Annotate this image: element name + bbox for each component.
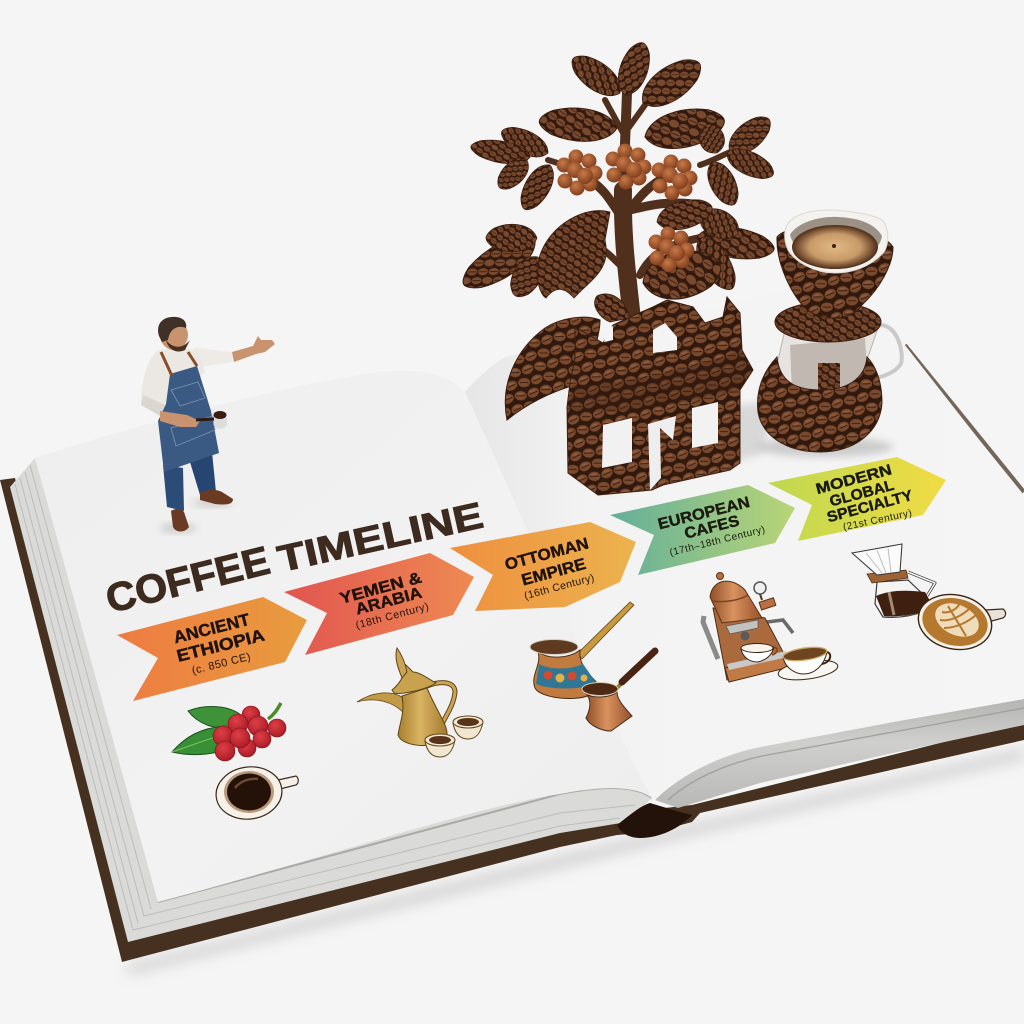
paper filter — [785, 210, 888, 273]
timeline arrow: Yemen and Arabia: (18th Century) — [354, 601, 430, 632]
shoes — [171, 509, 189, 532]
timeline arrow: Ancient Ethiopia: ANCIENT — [172, 610, 252, 647]
right page — [465, 275, 1024, 800]
coffee bean tree — [455, 38, 778, 322]
house body — [567, 297, 753, 495]
icon: cup and saucer — [777, 645, 839, 683]
title: COFFEE — [102, 539, 274, 622]
icon: Ottoman cezve pots — [530, 602, 655, 731]
legs — [163, 465, 184, 511]
shirt torso — [141, 348, 205, 417]
glass carafe — [760, 322, 880, 400]
left page stack — [10, 458, 652, 942]
cup — [214, 413, 227, 429]
left page — [35, 371, 652, 902]
coffee bed — [792, 225, 878, 269]
house windows — [602, 418, 632, 468]
timeline arrow: Ottoman Empire — [450, 522, 636, 611]
timeline arrow: Modern Global Specialty: (21st Century) — [842, 508, 913, 533]
book — [0, 275, 1024, 975]
timeline arrow: European Cafes: CAFES — [683, 513, 741, 543]
timeline arrow: European Cafes: EUROPEAN — [656, 494, 752, 533]
timeline arrow: European Cafes: (17th–18th Century) — [669, 524, 766, 559]
icon: coffee cherries with leaves — [172, 703, 286, 761]
timeline arrow: Ancient Ethiopia: ETHIOPIA — [175, 626, 267, 666]
timeline arrow: Modern Global Specialty — [768, 457, 946, 541]
timeline arrow: Modern Global Specialty: MODERN — [814, 461, 894, 498]
icon: copper espresso machine — [703, 572, 793, 682]
doorway — [648, 416, 676, 490]
timeline arrow: European Cafes — [610, 485, 795, 575]
timeline arrow: Yemen and Arabia: YEMEN & — [338, 569, 424, 608]
barista figure — [141, 317, 275, 532]
timeline arrow: Ottoman Empire: OTTOMAN — [503, 535, 591, 574]
apron — [158, 366, 219, 472]
carafe handle — [876, 325, 902, 378]
head — [160, 320, 188, 350]
timeline arrow: Ancient Ethiopia — [117, 597, 307, 701]
timeline arrow: Yemen and Arabia — [284, 553, 474, 655]
side leaf mass — [505, 317, 600, 420]
timeline arrow: Modern Global Specialty: SPECIALTY — [825, 487, 915, 526]
saucer — [775, 302, 881, 342]
coffee bean pour-over — [758, 210, 902, 452]
carafe base — [758, 357, 882, 452]
grounds inside — [818, 363, 840, 393]
timeline arrow: Ottoman Empire: (16th Century) — [523, 572, 596, 602]
trunk and branches — [548, 93, 735, 320]
apron straps — [161, 352, 197, 376]
icon: pour-over carafe — [852, 544, 935, 617]
right page stack — [655, 699, 1024, 808]
coffee bean house — [505, 297, 753, 495]
icon: espresso cup — [213, 763, 298, 823]
icon: Arabic dallah pot with cups — [357, 648, 483, 757]
title: TIMELINE — [274, 495, 487, 580]
timeline arrow: Modern Global Specialty: GLOBAL — [828, 477, 896, 510]
timeline arrow: Yemen and Arabia: ARABIA — [354, 585, 424, 619]
dripper cone — [777, 227, 893, 318]
object shadows — [160, 400, 893, 533]
book cover — [0, 478, 1024, 962]
bean leaves — [455, 38, 778, 322]
title — [102, 495, 487, 622]
book shadow — [125, 748, 1024, 975]
timeline arrow: Ancient Ethiopia: (c. 850 CE) — [191, 651, 252, 677]
forearm and hand — [160, 411, 200, 427]
extended arm — [232, 336, 275, 362]
coffee cherry clusters — [556, 150, 602, 196]
icon: latte art cup — [913, 588, 1006, 656]
timeline arrow: Ottoman Empire: EMPIRE — [520, 556, 588, 589]
spine — [617, 803, 692, 838]
